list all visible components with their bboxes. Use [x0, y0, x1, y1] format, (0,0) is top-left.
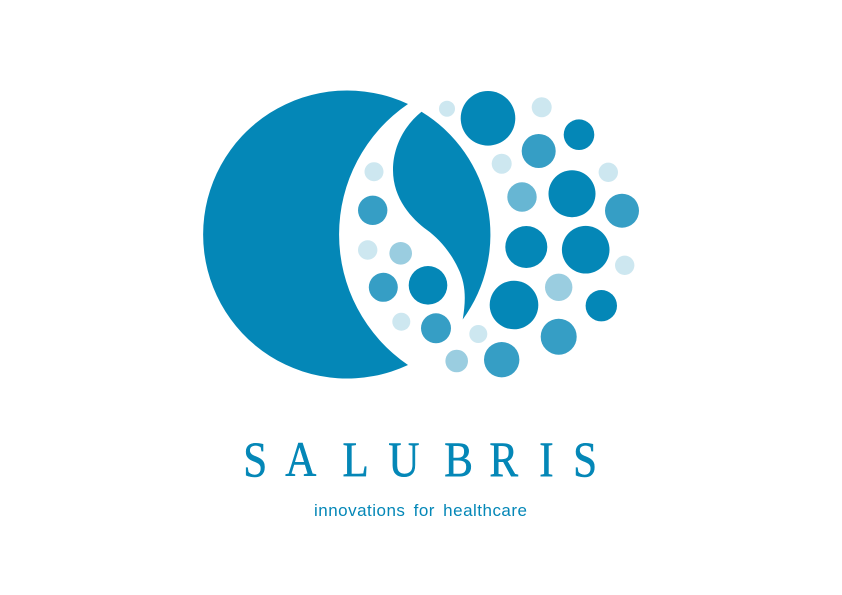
company name: SALUBRIS [243, 432, 597, 488]
logo mark [203, 91, 639, 379]
bubble soft [507, 182, 537, 212]
tagline: innovations for healthcare [314, 501, 527, 520]
s-shaped leaf [393, 112, 490, 320]
bubbles dark [409, 91, 617, 329]
bubbles light [389, 242, 572, 372]
crescent [203, 91, 408, 379]
bubbles palest [358, 97, 634, 343]
bubbles medium [358, 134, 639, 377]
